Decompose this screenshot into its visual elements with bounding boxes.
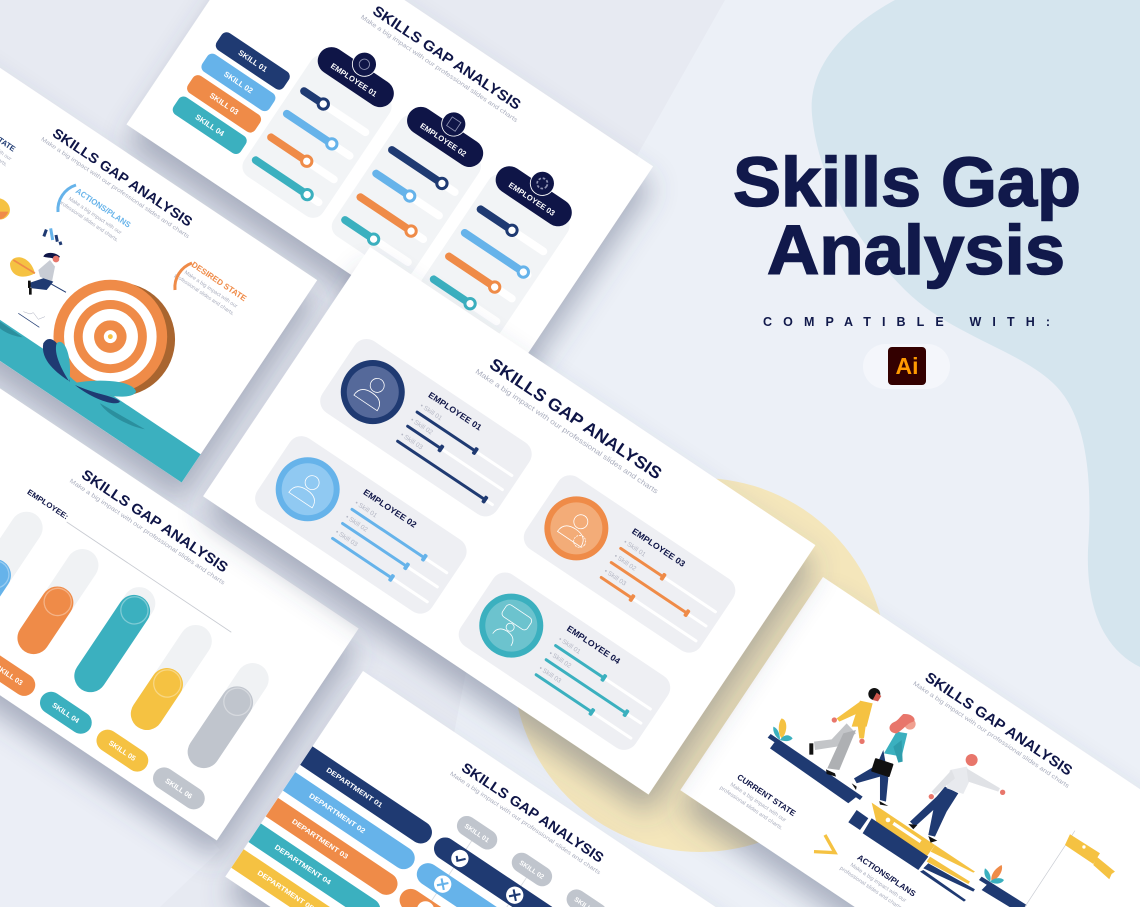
department bars: DEPARTMENT 01 [325, 767, 383, 810]
icon: adobe illustrator badge: Ai [896, 353, 918, 379]
desired state text: Make a big impact with our [183, 270, 239, 310]
card: employee 04: • Skill 03 [538, 665, 563, 685]
vertical bar chart [0, 467, 275, 774]
slide: current state to actions plans (bottom right) [680, 577, 1140, 907]
employee 01 column: EMPLOYEE 01 [329, 61, 379, 99]
skill header pills: SKILL 02 [518, 860, 545, 881]
actions/plans text [57, 182, 133, 245]
slide subtitle: Make a big impact with our professional slides and charts [912, 680, 1070, 790]
man pointing [908, 754, 1005, 843]
slide title: SKILLS GAP ANALYSIS [486, 355, 665, 483]
skill label pills: SKILL 04 [51, 701, 81, 725]
current state text [0, 108, 19, 168]
card: employee 03: EMPLOYEE 03 [630, 526, 687, 569]
main title: Analysis [767, 211, 1065, 289]
background blob: light blue [812, 0, 1140, 667]
department bars: DEPARTMENT 05 [256, 870, 315, 907]
arc: actions [58, 185, 76, 212]
department bars: DEPARTMENT 04 [273, 844, 332, 887]
slide subtitle: Make a big impact with our professional slides and charts [474, 367, 660, 496]
skill legend pills: SKILL 01 [237, 48, 270, 74]
card: employee 03: • Skill 02 [613, 553, 638, 573]
card: employee 01 [315, 334, 537, 522]
flag [1025, 831, 1115, 907]
skill legend pills: SKILL 04 [193, 112, 226, 139]
slide: employee skill cards (center) [203, 247, 815, 794]
card: employee 04: • Skill 02 [548, 650, 573, 670]
employee 03 column [416, 148, 589, 342]
card: employee 02: • Skill 02 [344, 514, 369, 534]
employee label: EMPLOYEE: [26, 487, 70, 521]
actions/plans text: ACTIONS/PLANS [74, 186, 133, 230]
department bars: DEPARTMENT 02 [307, 793, 366, 835]
illustration: team walking over books to flag [768, 688, 1115, 907]
slide subtitle: Make a big impact with our professional slides and charts [68, 478, 226, 586]
slide title: SKILLS GAP ANALYSIS [78, 467, 231, 577]
department bars [231, 746, 436, 907]
skill header pills: SKILL 01 [463, 823, 490, 844]
card: employee 02: • Skill 01 [353, 500, 378, 520]
card: employee 02 [250, 431, 472, 619]
employee 02 column [327, 88, 500, 282]
skill legend pills [170, 30, 292, 156]
employee 02 column: EMPLOYEE 02 [418, 121, 468, 159]
card: employee 04: EMPLOYEE 04 [565, 623, 622, 666]
main title [733, 143, 1081, 289]
teal ground band [0, 212, 201, 483]
background circle: yellow [513, 478, 887, 852]
chevron arrow [814, 835, 835, 853]
slide: employee skill sliders (top) [126, 0, 653, 381]
department bars: DEPARTMENT 03 [290, 818, 349, 861]
icon: adobe illustrator badge [863, 344, 950, 389]
card: employee 02: EMPLOYEE 02 [361, 487, 419, 530]
current state text: professional slides and charts. [718, 785, 784, 832]
actions/plans text: professional slides and charts. [57, 199, 119, 244]
card: employee 03: • Skill 03 [603, 568, 628, 588]
card: employee 03: • Skill 01 [622, 539, 647, 559]
current state text: Make a big impact with our [729, 782, 787, 824]
card: employee 01: • Skill 01 [419, 402, 444, 422]
skill legend pills: SKILL 02 [222, 70, 255, 95]
employee 03 column: EMPLOYEE 03 [507, 180, 557, 218]
target [31, 256, 197, 420]
compatible with label: COMPATIBLE WITH: [763, 315, 1050, 329]
slide title: SKILLS GAP ANALYSIS [459, 759, 607, 866]
current state text [718, 768, 798, 833]
slide subtitle: Make a big impact with our professional slides and charts [448, 771, 601, 876]
matrix rows with marks [395, 833, 716, 907]
skill label pills: SKILL 06 [164, 776, 194, 801]
arc: desired [175, 263, 192, 290]
woman with briefcase [852, 714, 916, 806]
platform left [768, 718, 863, 803]
skill legend pills: SKILL 03 [208, 91, 241, 117]
slide subtitle: Make a big impact with our professional slides and charts [359, 14, 519, 124]
books stack [848, 803, 975, 902]
card: employee 04: • Skill 01 [557, 636, 582, 656]
skill label pills: SKILL 05 [107, 738, 138, 763]
slide: department skill matrix (bottom middle) [225, 671, 758, 907]
slide: skill bar chart (bottom left) [0, 375, 359, 840]
right platform with plant [979, 865, 1027, 907]
slide subtitle: Make a big impact with our professional slides and charts [40, 137, 190, 240]
actions/plans text [838, 848, 918, 907]
slide: target current to desired state (left) [0, 38, 317, 483]
main title: Skills Gap [733, 143, 1081, 221]
card: employee 04 [453, 567, 676, 755]
card: employee 01: • Skill 03 [399, 432, 424, 451]
current state text: CURRENT STATE [735, 773, 798, 818]
card: employee 01: • Skill 02 [409, 417, 434, 437]
slide title: SKILLS GAP ANALYSIS [369, 3, 524, 114]
desired state text: DESIRED STATE [190, 260, 249, 304]
skill header pills [365, 812, 611, 907]
slide title: SKILLS GAP ANALYSIS [922, 670, 1075, 780]
actions/plans text: Make a big impact with our [67, 196, 123, 236]
man in yellow shirt [809, 688, 881, 777]
actions/plans text: ACTIONS/PLANS [855, 853, 918, 899]
slide title: SKILLS GAP ANALYSIS [50, 126, 195, 230]
card: employee 03 [518, 470, 741, 658]
desired state text [173, 256, 249, 318]
desired state text: professional slides and charts. [173, 273, 235, 317]
employee 01 column [238, 28, 411, 223]
skill label pills [0, 612, 209, 814]
illustration: leaves, woman and dart [0, 198, 145, 429]
actions/plans text: Make a big impact with our [849, 862, 907, 904]
card: employee 02: • Skill 03 [334, 529, 359, 549]
card: employee 01: EMPLOYEE 01 [427, 390, 484, 433]
